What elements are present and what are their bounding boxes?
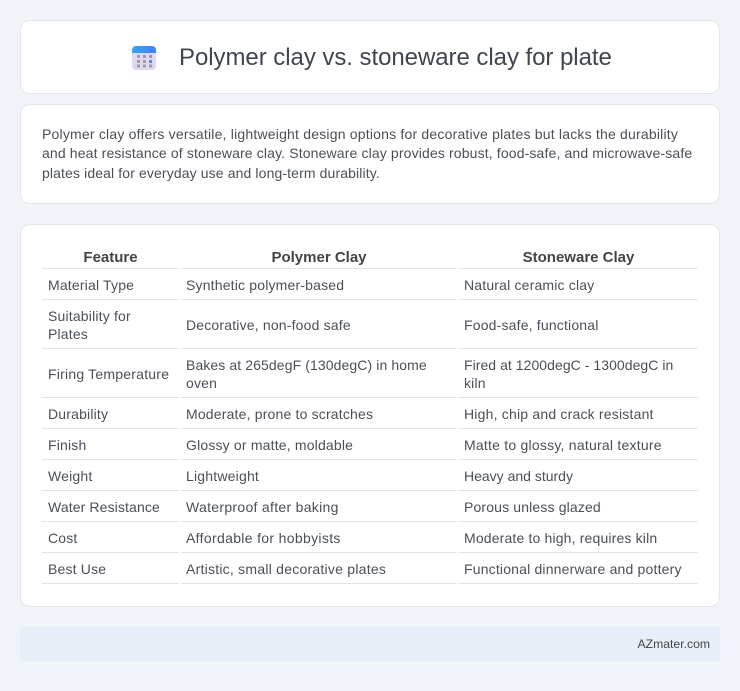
row: cost: Moderate to high, requires kiln (464, 530, 657, 546)
row: best use: Functional dinnerware and pottery (464, 561, 682, 577)
row: best use: Best Use (48, 561, 106, 577)
icon: calendar (132, 46, 156, 70)
row: best use (42, 561, 698, 584)
table header (83, 249, 634, 266)
row: suitability: Suitability for (48, 308, 131, 324)
row: cost: Affordable for hobbyists (186, 530, 341, 546)
row: material type: Natural ceramic clay (464, 277, 594, 293)
row: weight (42, 468, 698, 491)
row: firing temperature: oven (186, 375, 217, 391)
summary card (20, 104, 720, 204)
row: material type (42, 277, 698, 300)
row: suitability: Decorative, non-food safe (186, 317, 351, 333)
row: firing temperature (42, 357, 698, 398)
row: suitability: Food-safe, functional (464, 317, 599, 333)
summary text: plates ideal for everyday use and long-term durability. (42, 165, 380, 181)
row: best use: Artistic, small decorative plates (186, 561, 386, 577)
summary text: and heat resistance of stoneware clay. Stoneware clay provides robust, food-safe, and microwave-safe (42, 145, 692, 161)
row: finish: Glossy or matte, moldable (186, 437, 353, 453)
summary text (42, 126, 692, 181)
row: finish: Matte to glossy, natural texture (464, 437, 662, 453)
row: water resistance: Porous unless glazed (464, 499, 601, 515)
row: firing temperature: Firing Temperature (48, 366, 169, 382)
row: firing temperature: Bakes at 265degF (130degC) in home (186, 357, 427, 373)
row: weight: Lightweight (186, 468, 259, 484)
row: cost (42, 530, 698, 553)
row: water resistance: Waterproof after baking (186, 499, 339, 515)
row: suitability: Plates (48, 326, 88, 342)
row: durability: Moderate, prone to scratches (186, 406, 373, 422)
row: firing temperature: Fired at 1200degC - 1300degC in (464, 357, 673, 373)
row: finish: Finish (48, 437, 86, 453)
footer bar (20, 627, 720, 661)
row: weight: Heavy and sturdy (464, 468, 573, 484)
row: material type: Synthetic polymer-based (186, 277, 344, 293)
title: Polymer clay vs. stoneware clay for plate (179, 44, 612, 71)
row: weight: Weight (48, 468, 92, 484)
row: water resistance: Water Resistance (48, 499, 160, 515)
table header: Feature (83, 249, 138, 266)
row: material type: Material Type (48, 277, 134, 293)
row: durability: High, chip and crack resistant (464, 406, 654, 422)
table header: Polymer Clay (271, 249, 367, 266)
row: suitability (42, 308, 698, 349)
row: firing temperature: kiln (464, 375, 486, 391)
row: finish (42, 437, 698, 460)
row: durability (42, 406, 698, 429)
row: cost: Cost (48, 530, 78, 546)
table header: Stoneware Clay (523, 249, 634, 266)
comparison table card (20, 224, 720, 607)
summary text: Polymer clay offers versatile, lightweight design options for decorative plates but lacks the durability (42, 126, 678, 142)
row: water resistance (42, 499, 698, 522)
title card (20, 20, 720, 94)
header rule (42, 268, 698, 269)
row: durability: Durability (48, 406, 108, 422)
footer credit: AZmater.com (638, 637, 710, 651)
